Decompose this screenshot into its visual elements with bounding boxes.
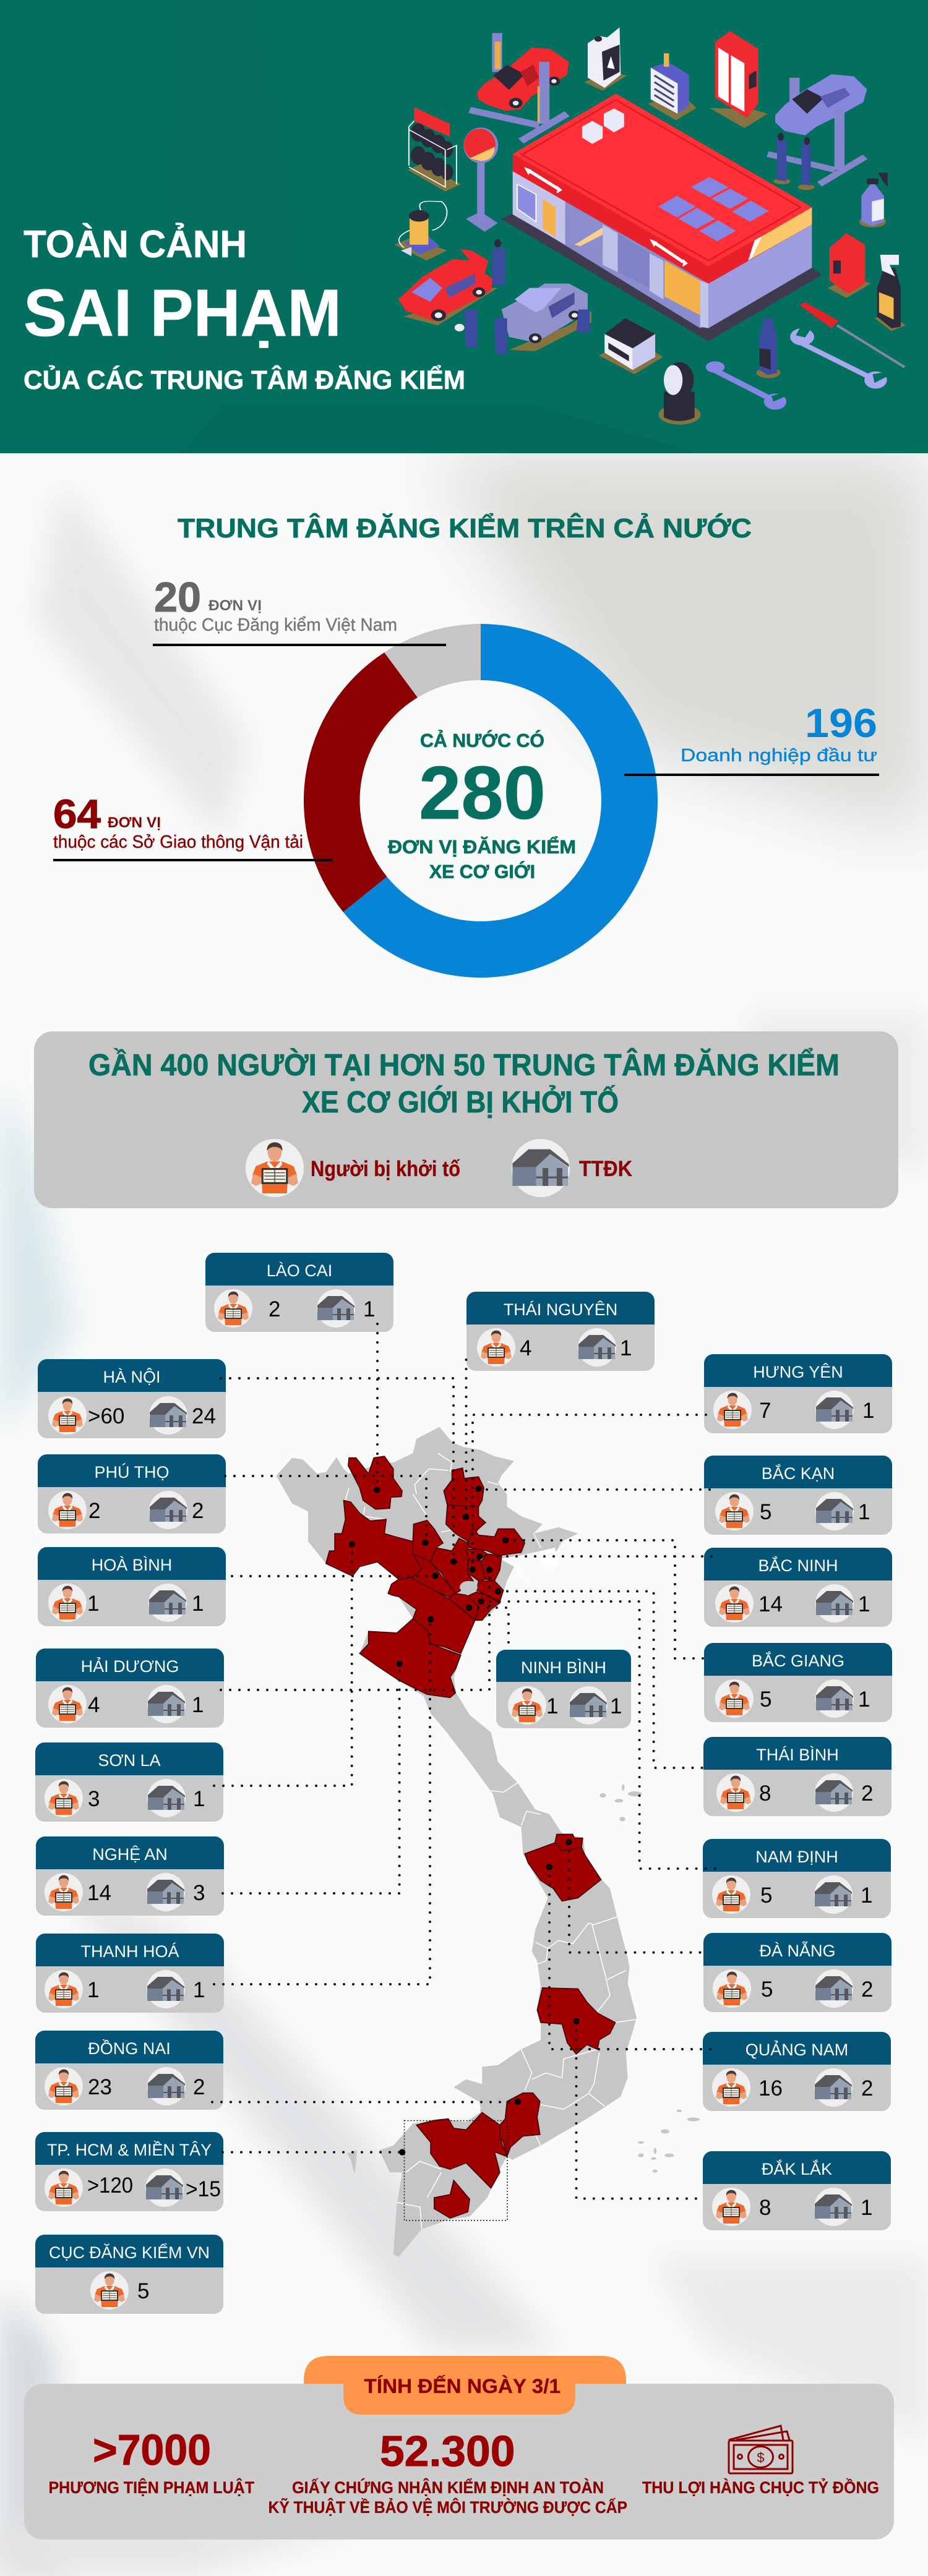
icon: centre [147,1970,185,2008]
card: Ninh Bình: NINH BÌNH [521,1658,606,1677]
panel: prosecuted people summary [34,1031,898,1208]
legend: inspection centre: TTĐK [579,1157,632,1181]
callout: 20 units: ĐƠN VỊ [208,597,262,614]
card: Hưng Yên: 1 [862,1399,874,1423]
bottles and cans [757,173,906,378]
map base: grey country shape [276,1427,637,2257]
stat: certificates [269,2427,627,2517]
header title [24,223,465,395]
callout: 64 units [53,791,332,861]
callout: 196 enterprises [624,700,879,776]
card: TP. HCM & Miền Tây: TP. HCM & MIỀN TÂY [47,2140,212,2159]
card: Đà Nẵng: 2 [861,1977,873,2002]
card: Nam Định: 1 [861,1883,872,1908]
card: Hưng Yên [704,1354,892,1433]
card: Quảng Nam [703,2032,891,2111]
blue car on lift with mechanics [768,74,867,190]
card: Bắc Giang: 1 [858,1687,870,1712]
card: Cục Đăng kiểm VN: 5 [137,2279,149,2303]
card: Bắc Kạn [704,1456,892,1535]
card: Hưng Yên: 7 [759,1399,771,1423]
tyre stack [658,362,700,425]
header title: CỦA CÁC TRUNG TÂM ĐĂNG KIỂM [24,365,465,395]
icon: person [712,2068,750,2107]
oil jug [584,27,627,91]
icon: person [48,1491,87,1529]
card: Thái Bình: THÁI BÌNH [756,1746,839,1764]
icon: person [715,1679,754,1718]
card: Thanh Hoá: THANH HOÁ [80,1942,179,1961]
card: Cục Đăng kiểm VN [35,2235,223,2314]
donut centre text [388,729,576,882]
legend: person prosecuted [246,1139,460,1197]
card: Thái Bình: 8 [759,1781,771,1806]
segment: transport departments 64 [304,652,418,912]
panel heading: GẦN 400 NGƯỜI TẠI HƠN 50 TRUNG TÂM ĐĂNG KIỂM [88,1048,840,1082]
card: Lào Cai [205,1253,393,1332]
card: Cục Đăng kiểm VN: CỤC ĐĂNG KIỂM VN [49,2243,210,2262]
card: Hoà Bình: 1 [192,1592,204,1616]
card: Đồng Nai: 2 [193,2075,205,2099]
panel heading [88,1048,840,1119]
card: Thanh Hoá: 1 [87,1978,99,2002]
tool chest [648,53,697,121]
card: Đắk Lắk [703,2151,891,2230]
icon: centre [814,2188,853,2226]
icon: person [90,2271,129,2309]
card: Quảng Nam: 16 [758,2076,783,2100]
card: Đồng Nai: ĐỒNG NAI [88,2039,171,2058]
icon: centre [147,1779,186,1817]
icon: centre [815,1773,853,1812]
icon: person [712,1875,750,1914]
card: Ninh Bình: 1 [546,1694,558,1718]
icon: person [45,1873,83,1911]
card: Hoà Bình: 1 [87,1592,99,1616]
icon: centre [815,1679,854,1718]
card: Nghệ An: 14 [87,1881,111,1905]
card: TP. HCM & Miền Tây: >120 [87,2173,133,2198]
card: Nghệ An: NGHỆ AN [92,1845,168,1864]
card: Phú Thọ: 2 [192,1499,204,1523]
callout: 20 units: thuộc Cục Đăng kiểm Việt Nam [154,615,397,635]
card: Hải Dương: 1 [192,1693,204,1717]
donut centre text: CẢ NƯỚC CÓ [420,729,544,751]
callout: 64 units: 64 [53,791,101,837]
icon: person [508,1686,546,1725]
card: Hà Nội: >60 [88,1404,124,1428]
icon: centre [815,1584,854,1623]
card: Thái Nguyên [466,1292,655,1371]
card: Đà Nẵng: ĐÀ NẴNG [759,1940,836,1960]
segment: registry department 20 [384,624,481,697]
card: Thanh Hoá: 1 [193,1978,205,2002]
card: Sơn La: 1 [193,1787,205,1811]
card: Đắk Lắk: ĐẮK LẮK [762,2159,832,2178]
red car open bonnet with mechanic [398,239,505,325]
card: Bắc Giang: BẮC GIANG [752,1651,844,1670]
card: Ninh Bình [496,1650,631,1728]
dotted leader lines [212,1324,720,2199]
card: Bắc Ninh: BẮC NINH [758,1556,838,1575]
stat: certificates: KỸ THUẬT VỀ BẢO VỆ MÔI TRƯỜNG ĐƯỢC CẤP [269,2497,627,2517]
card: Hải Dương: 4 [88,1693,100,1717]
card: Phú Thọ: PHÚ THỌ [94,1462,170,1482]
icon: centre [149,1396,187,1435]
panel: totals as of 3/1 [24,2356,894,2540]
stat: vehicles [48,2426,254,2497]
card: Thái Nguyên: 1 [620,1336,632,1360]
stat: illegal profit: $ [757,2450,765,2465]
icon: centre [147,1685,186,1723]
card: Hoà Bình: HOÀ BÌNH [92,1556,172,1574]
icon: centre [815,1969,853,2008]
card: Hải Dương [36,1648,224,1728]
card: Đà Nẵng [703,1933,891,2012]
icon: person [45,2067,83,2105]
card: Đắk Lắk: 8 [759,2196,771,2220]
card: Phú Thọ [38,1454,226,1533]
card: Lào Cai: LÀO CAI [267,1261,332,1280]
callout: 196 enterprises: Doanh nghiệp đầu tư [681,746,877,766]
card: Hà Nội: 24 [192,1404,216,1428]
building [501,93,822,341]
illustration: isometric garage and tools [395,27,906,425]
stat: vehicles: >7000 [93,2426,211,2474]
card: Bắc Kạn: BẮC KẠN [762,1464,835,1483]
card: Phú Thọ: 2 [88,1499,100,1523]
donut chart [304,624,658,978]
legend: inspection centre [512,1139,632,1197]
icon: centre [578,1328,616,1367]
icon: person [214,1289,252,1328]
battery [599,318,663,374]
highlighted provinces: north [326,1456,525,1697]
stat: certificates: GIẤY CHỨNG NHẬN KIỂM ĐỊNH AN TOÀN [292,2478,604,2497]
card: Nam Định: 5 [760,1883,772,1908]
wrenches and screwdriver [706,302,904,410]
stat: certificates: 52.300 [380,2427,515,2475]
card: Hà Nội: HÀ NỘI [103,1367,161,1386]
card: TP. HCM & Miền Tây [35,2132,223,2211]
icon: person [45,1779,83,1817]
card: Quảng Nam: QUẢNG NAM [745,2039,848,2059]
map of Vietnam [276,1427,700,2257]
callout: 64 units: thuộc các Sở Giao thông Vận tải [53,832,303,852]
icon: person [48,1685,87,1723]
icon: person [45,1970,83,2008]
icon: centre [317,1289,355,1328]
card: Hà Nội [38,1359,226,1438]
card: Thái Bình [703,1737,891,1816]
legend: person prosecuted: Người bị khởi tố [311,1157,460,1181]
heading: centres nationwide: TRUNG TÂM ĐĂNG KIỂM TRÊN CẢ NƯỚC [178,512,752,544]
icon: banknotes [729,2426,793,2473]
card: Bắc Giang: 5 [760,1687,771,1712]
card: Thái Nguyên: 4 [520,1336,531,1360]
date label: TÍNH ĐẾN NGÀY 3/1 [364,2375,561,2397]
card: Sơn La [35,1742,223,1822]
card: TP. HCM & Miền Tây: >15 [186,2177,221,2201]
card: Bắc Kạn: 1 [858,1500,870,1524]
card: Lào Cai: 2 [269,1297,280,1321]
southern region box [405,2121,507,2220]
card: Ninh Bình: 1 [610,1694,622,1718]
card: Bắc Ninh: 1 [858,1592,870,1616]
panel heading: XE CƠ GIỚI BỊ KHỞI TỐ [302,1085,619,1119]
icon: centre [814,2068,853,2107]
highlighted provinces: centre and south [399,1834,616,2218]
card: Hưng Yên: HƯNG YÊN [753,1362,843,1381]
red cabinet [710,31,768,128]
icon: centre [149,1491,187,1529]
card: Thái Nguyên: THÁI NGUYÊN [504,1300,617,1319]
callout: 20 units [153,574,446,646]
card: Hoà Bình [38,1547,226,1626]
icon: person [715,1584,754,1623]
card: Đồng Nai: 23 [88,2075,112,2099]
orange date tab behind [304,2356,626,2387]
icon: centre [148,1584,187,1622]
icon: centre [815,1492,854,1530]
card: Nam Định: NAM ĐỊNH [755,1848,838,1866]
icon: centre [147,1873,185,1911]
islands [347,1785,700,2174]
icon: person [715,1492,754,1530]
stat: vehicles: PHƯƠNG TIỆN PHẠM LUẬT [48,2478,254,2497]
card: Lào Cai: 1 [363,1297,375,1321]
card: Sơn La: 3 [88,1787,100,1811]
card: Thanh Hoá [36,1934,224,2013]
icon: person [477,1328,515,1367]
callout: 64 units: ĐƠN VỊ [108,814,161,831]
stat: illegal profit [642,2426,879,2497]
card: Hải Dương: HẢI DƯƠNG [81,1656,179,1676]
card: Đắk Lắk: 1 [861,2196,872,2220]
card: Bắc Giang [704,1643,892,1722]
icon: centre [815,1391,854,1429]
stat: illegal profit: THU LỢI HÀNG CHỤC TỶ ĐỒNG [642,2477,879,2497]
header title: TOÀN CẢNH [24,223,247,266]
card: Quảng Nam: 2 [861,2076,873,2100]
red car on lift [470,33,569,141]
card: Bắc Kạn: 5 [760,1500,771,1524]
callout: 196 enterprises: 196 [805,700,877,746]
card: Nghệ An: 3 [193,1881,205,1905]
icon: person [48,1396,87,1435]
icon: centre [147,2067,186,2105]
segment: enterprises 196 [343,624,658,978]
icon: person [45,2169,83,2207]
header title: SAI PHẠM [24,275,342,350]
card: Bắc Ninh: 14 [758,1592,783,1616]
icon: person [716,1773,755,1812]
donut centre text: XE CƠ GIỚI [429,860,535,882]
card: Đà Nẵng: 5 [761,1977,773,2002]
donut centre text: 280 [419,751,546,835]
icon: person [713,1969,751,2008]
donut centre text: ĐƠN VỊ ĐĂNG KIỂM [388,836,576,858]
icon: centre [814,1875,853,1914]
card: Đồng Nai [35,2031,223,2110]
card: Thái Bình: 2 [861,1781,873,1806]
sign post [463,127,498,232]
icon: person [712,2188,750,2226]
card: Sơn La: SƠN LA [98,1751,161,1770]
icon: centre [569,1686,608,1725]
icon: person [713,1391,752,1429]
card: Nam Định [703,1839,891,1918]
card: Nghệ An [36,1836,224,1916]
callout: 20 units: 20 [154,574,201,621]
icon: person [48,1584,87,1622]
icon: centre [145,2169,184,2207]
header banner [0,0,928,453]
orange date tab front [343,2381,575,2415]
tyre rack [408,107,461,192]
card: Bắc Ninh [704,1548,892,1627]
blue car with mechanics [455,284,591,354]
vacuum cleaner [395,201,447,260]
